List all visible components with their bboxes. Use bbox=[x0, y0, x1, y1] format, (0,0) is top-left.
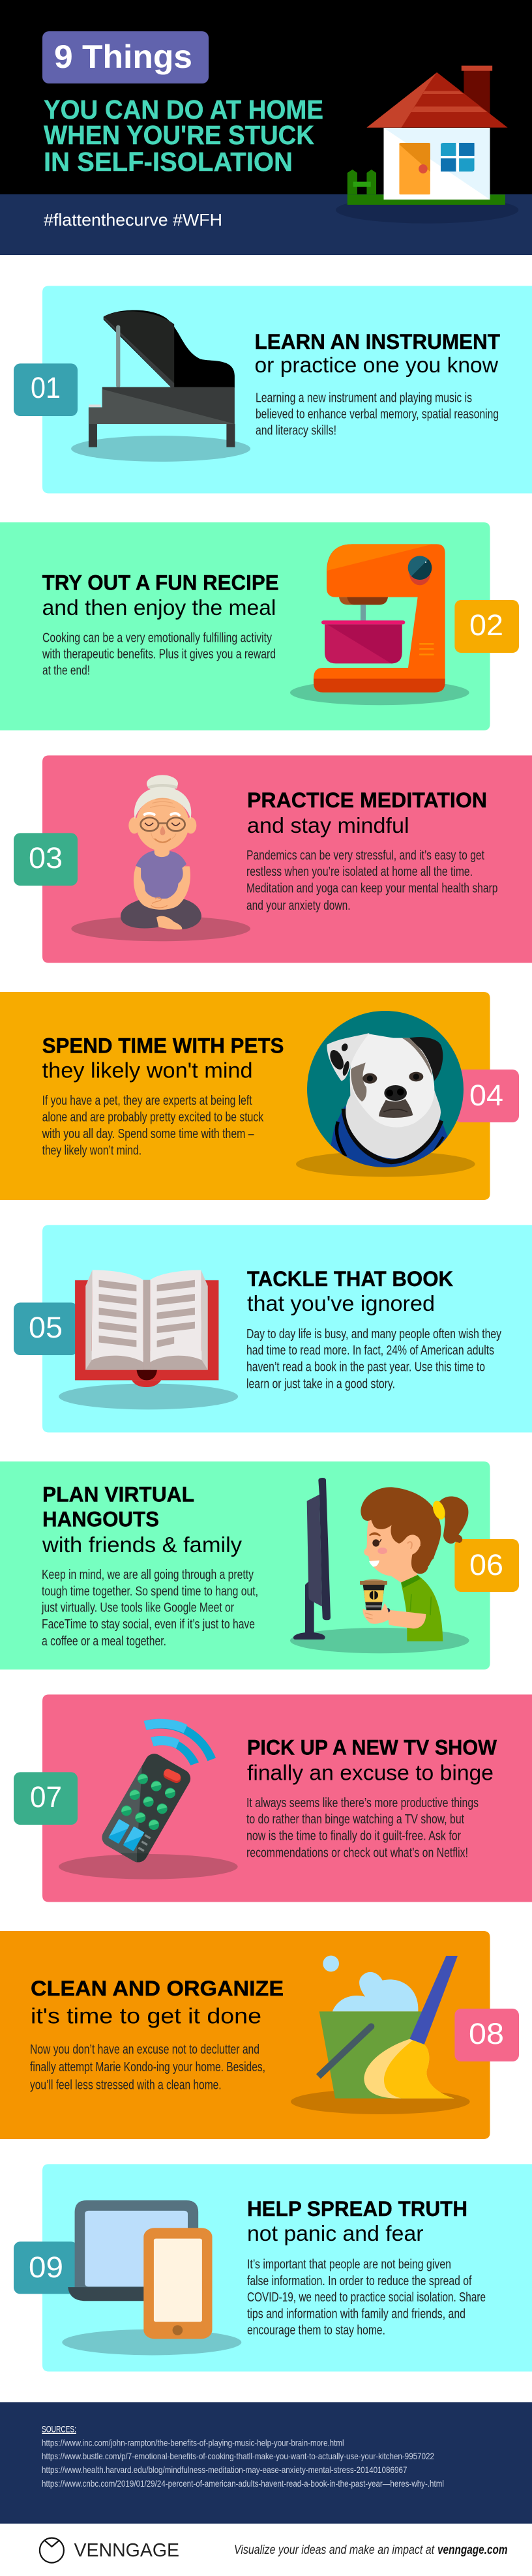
body text: If you have a pet, they are experts at being left bbox=[42, 1093, 252, 1108]
number badge 03 bbox=[14, 833, 78, 886]
body text bbox=[41, 1567, 258, 1649]
heading: CLEAN AND ORGANIZE bbox=[31, 1977, 284, 2000]
number badge 09 bbox=[14, 2241, 78, 2294]
icon: meditating grandmother bbox=[71, 775, 250, 941]
number badge 08 bbox=[454, 2009, 519, 2061]
icon: house bbox=[336, 66, 518, 224]
subtitle: it's time to get it done bbox=[31, 2004, 261, 2028]
number badge 02 bbox=[454, 600, 519, 653]
icon: grand piano bbox=[71, 310, 250, 462]
sources list: https://www.bustle.com/p/7-emotional-benefits-of-cooking-thatll-make-you-want-to-actually-use-your-kitchen-9957022 bbox=[42, 2451, 434, 2461]
heading bbox=[42, 1483, 194, 1531]
body text: now is the time to finally do it guilt-free. Ask for bbox=[246, 1829, 461, 1844]
panel: 06 plan virtual hangouts bbox=[0, 1461, 519, 1670]
body text: they likely won’t mind. bbox=[42, 1143, 141, 1158]
sources list: https://www.cnbc.com/2019/01/29/24-percent-of-american-adults-havent-read-a-book-in-the-past-year—heres-why-.html bbox=[42, 2478, 444, 2489]
number badge 06: 06 bbox=[469, 1548, 503, 1581]
subtitle: not panic and fear bbox=[247, 2221, 424, 2245]
header band bbox=[0, 0, 532, 255]
body text: you’ll feel less stressed with a clean home. bbox=[30, 2078, 222, 2092]
sources list: https://www.inc.com/john-rampton/the-benefits-of-playing-music-help-your-brain-more.html bbox=[42, 2438, 344, 2448]
number badge 04 bbox=[454, 1070, 519, 1122]
body text bbox=[247, 2257, 486, 2338]
heading: SPEND TIME WITH PETS bbox=[42, 1034, 284, 1057]
panel: 07 pick up a new tv show bbox=[14, 1694, 532, 1902]
title badge: 9 Things: 9 Things bbox=[54, 38, 192, 75]
wordmark: VENNGAGE bbox=[74, 2540, 179, 2561]
icon: laptop and phone bbox=[62, 2200, 241, 2355]
body text bbox=[256, 391, 499, 438]
icon: girl with coffee at monitor bbox=[290, 1478, 469, 1653]
title badge: 9 Things bbox=[42, 31, 209, 83]
icon: tv remote bbox=[59, 1719, 238, 1886]
body text: FaceTime to stay social, even if it’s just to have bbox=[42, 1617, 255, 1632]
panel: 08 clean and organize bbox=[0, 1931, 519, 2139]
subtitle: finally an excuse to binge bbox=[247, 1760, 494, 1784]
body text: finally attempt Marie Kondo-ing your home. Besides, bbox=[30, 2059, 265, 2074]
body text: Learning a new instrument and playing music is bbox=[256, 391, 472, 406]
title: YOU CAN DO AT HOME bbox=[44, 95, 323, 125]
body text: learn or just take in a good story. bbox=[246, 1376, 395, 1391]
body text: recommendations or check out what’s on Netflix! bbox=[246, 1846, 468, 1860]
heading: HANGOUTS bbox=[42, 1508, 159, 1531]
title bbox=[44, 95, 323, 177]
body text bbox=[30, 2042, 265, 2092]
body text bbox=[42, 1093, 264, 1158]
number badge 09: 09 bbox=[29, 2251, 63, 2284]
body text bbox=[42, 631, 276, 678]
tagline: venngage.com bbox=[437, 2543, 508, 2557]
body text: tips and information with family and friends, and bbox=[247, 2307, 466, 2322]
body text bbox=[246, 1326, 502, 1391]
panel: 03 practice meditation bbox=[14, 755, 532, 963]
tagline: Visualize your ideas and make an impact at bbox=[234, 2543, 435, 2557]
body text: It’s important that people are not being given bbox=[247, 2257, 451, 2272]
icon: stand mixer bbox=[290, 544, 469, 705]
number badge 02: 02 bbox=[469, 608, 503, 642]
body text: encourage them to stay home. bbox=[247, 2323, 385, 2338]
sources heading: SOURCES: bbox=[42, 2424, 76, 2434]
panel: 09 help spread truth bbox=[14, 2164, 532, 2371]
heading: PLAN VIRTUAL bbox=[42, 1483, 194, 1506]
panel: 05 tackle that book bbox=[14, 1225, 532, 1432]
icon: bucket and broom bbox=[291, 1956, 470, 2114]
body text: Keep in mind, we are all going through a pretty bbox=[42, 1567, 254, 1582]
number badge 04: 04 bbox=[469, 1079, 503, 1112]
heading: TRY OUT A FUN RECIPE bbox=[42, 571, 279, 595]
body text: Now you don’t have an excuse not to declutter and bbox=[30, 2042, 259, 2057]
number badge 03: 03 bbox=[29, 841, 63, 875]
body text: tough time together. So spend time to hang out, bbox=[42, 1583, 258, 1599]
panel: 02 try a fun recipe bbox=[0, 522, 519, 730]
subtitle: they likely won't mind bbox=[42, 1058, 253, 1082]
body text bbox=[246, 848, 498, 913]
heading: HELP SPREAD TRUTH bbox=[247, 2197, 467, 2221]
subtitle: or practice one you know bbox=[254, 353, 498, 377]
number badge 08: 08 bbox=[469, 2017, 504, 2050]
heading: TACKLE THAT BOOK bbox=[247, 1267, 453, 1291]
icon: dog portrait bbox=[296, 1011, 475, 1177]
body text: Cooking can be a very emotionally fulfilling activity bbox=[42, 631, 273, 646]
body text: and your anxiety down. bbox=[246, 898, 351, 913]
body text: alone and are probably pretty excited to be stuck bbox=[42, 1110, 264, 1124]
title: WHEN YOU'RE STUCK bbox=[44, 120, 314, 150]
body text: false information. In order to reduce the spread of bbox=[247, 2273, 472, 2288]
heading: PRACTICE MEDITATION bbox=[247, 788, 487, 812]
body text: a coffee or a meal together. bbox=[42, 1634, 166, 1649]
footer branding bbox=[40, 2538, 508, 2563]
number badge 07 bbox=[14, 1772, 78, 1825]
heading: PICK UP A NEW TV SHOW bbox=[247, 1736, 497, 1760]
number badge 07: 07 bbox=[30, 1780, 62, 1814]
subtitle: with friends & family bbox=[42, 1533, 243, 1557]
body text: and literacy skills! bbox=[256, 423, 336, 438]
number badge 01 bbox=[14, 363, 78, 416]
title: IN SELF-ISOLATION bbox=[44, 147, 293, 177]
body text: with therapeutic benefits. Plus it gives you a reward bbox=[42, 647, 276, 662]
subtitle: and stay mindful bbox=[247, 813, 409, 837]
number badge 06 bbox=[454, 1539, 519, 1592]
panel: sources bbox=[0, 2402, 532, 2524]
body text: at the end! bbox=[42, 663, 90, 678]
number badge 05 bbox=[14, 1302, 78, 1355]
icon: venngage logo bbox=[40, 2538, 64, 2563]
body text bbox=[246, 1795, 479, 1860]
body text: to do rather than binge watching a TV show, but bbox=[246, 1812, 464, 1827]
heading: LEARN AN INSTRUMENT bbox=[254, 330, 500, 353]
subtitle: and then enjoy the meal bbox=[42, 595, 276, 620]
icon: open book bbox=[59, 1270, 238, 1409]
number badge 05: 05 bbox=[29, 1311, 63, 1344]
sources list bbox=[42, 2438, 444, 2489]
number badge 01: 01 bbox=[31, 371, 61, 404]
panel: 04 spend time with pets bbox=[0, 992, 519, 1200]
subtitle: that you've ignored bbox=[247, 1291, 435, 1315]
body text: with you all day. Spend some time with them – bbox=[42, 1126, 254, 1141]
sources list: https://www.health.harvard.edu/blog/mindfulness-meditation-may-ease-anxiety-mental-stress-201401086967 bbox=[42, 2464, 407, 2475]
hashtags: #flattenthecurve #WFH bbox=[44, 210, 222, 230]
panel: 01 learn an instrument bbox=[14, 286, 532, 493]
body text: just virtually. Use tools like Google Meet or bbox=[41, 1600, 234, 1615]
